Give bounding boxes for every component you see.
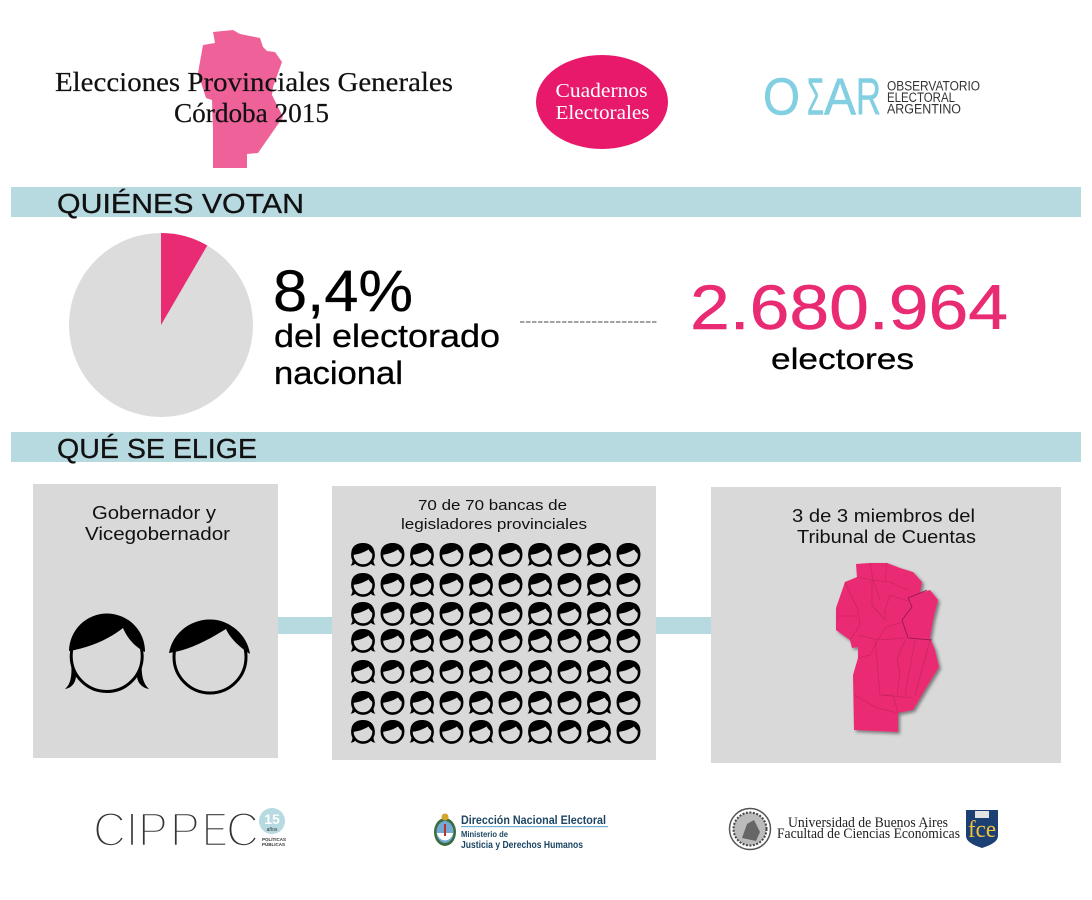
title: Córdoba 2015 [174,98,329,128]
logo: CIPPEC: PÚBLICAS [262,841,285,847]
badge: 15 años: 15 [264,811,280,827]
panel heading: Gobernador y [92,503,216,523]
logo: OEAR [763,68,980,126]
panel heading: Tribunal de Cuentas [797,527,976,547]
logo: OEAR: OBSERVATORIO [887,78,980,94]
logo: OEAR: O [763,68,800,126]
map: Córdoba departments [836,563,939,732]
icon: UBA seal [730,808,770,850]
icon: man face [169,620,250,693]
title: Elecciones Provinciales Generales [55,67,453,97]
logo: OEAR: A [824,68,856,126]
logo: OEAR: ARGENTINO [887,102,961,116]
logo: Dirección Nacional Electoral [434,814,608,851]
section band: Qué se elige: QUÉ SE ELIGE [57,433,257,464]
connector bars between panels [278,617,711,634]
stat: 8,4% del electorado nacional: del electorado [274,318,500,354]
icon: fce shield [966,810,998,848]
logo: CIPPEC: P [138,804,168,857]
stat: 8,4% del electorado nacional [273,259,500,391]
logo: OEAR: R [856,68,881,126]
badge: 15 años: años [267,827,278,833]
logo: CIPPEC: I [126,804,138,857]
logo: CIPPEC: E [202,804,228,857]
logo: CIPPEC: POLÍTICAS [262,835,286,842]
icon: national coat of arms [434,814,456,846]
panel heading [401,497,587,533]
logo: CIPPEC [93,804,286,857]
stat: 2.680.964 electores [690,273,1008,376]
panel heading: Vicegobernador [85,524,230,544]
icon: fce shield: fce [968,817,996,843]
logo: Dirección Nacional Electoral: Ministerio de [461,830,509,839]
panel: Gobernador y Vicegobernador [33,484,278,758]
logo: CIPPEC: P [170,804,200,857]
stat: 8,4% del electorado nacional: 8,4% [273,259,413,324]
icon grid: 70 faces [350,543,640,743]
panel heading: 70 de 70 bancas de [418,497,567,514]
logo: CIPPEC: C [93,804,126,857]
panel: Tribunal de Cuentas [711,487,1061,763]
logo: OEAR: ELECTORAL [887,90,955,105]
panel: 70 legisladores [332,486,656,760]
dashed connector [520,321,658,323]
panel heading: legisladores provinciales [401,516,587,533]
icon: woman face [65,613,149,692]
badge: Cuadernos Electorales [536,55,668,149]
stat: 8,4% del electorado nacional: nacional [274,355,403,391]
stat: 2.680.964 electores: 2.680.964 [690,273,1008,343]
logo: CIPPEC: C [226,804,259,857]
logo: Dirección Nacional Electoral: Dirección Nacional Electoral [461,815,606,827]
panel heading: 3 de 3 miembros del [792,506,975,526]
pie chart: 8,4% [69,233,253,417]
section band: Quiénes votan: QUIÉNES VOTAN [57,188,304,219]
badge: 15 años [259,808,285,834]
panel heading [85,503,230,544]
badge: Cuadernos Electorales: Cuadernos [556,80,648,102]
panel heading [792,506,976,547]
title [55,67,453,128]
badge: Cuadernos Electorales: Electorales [556,102,650,124]
logo: Dirección Nacional Electoral: Justicia y Derechos Humanos [461,840,583,851]
logo: Universidad de Buenos Aires: Universidad de Buenos Aires [788,815,948,831]
section band: Quiénes votan [11,187,1081,219]
logo: OEAR: Σ [807,68,824,126]
logo: Universidad de Buenos Aires: Facultad de Ciencias Económicas [777,826,960,842]
map: Córdoba province silhouette behind title [198,30,283,168]
stat: 2.680.964 electores: electores [771,343,914,376]
section band: Qué se elige [11,432,1081,464]
logo: Universidad de Buenos Aires [730,808,998,850]
